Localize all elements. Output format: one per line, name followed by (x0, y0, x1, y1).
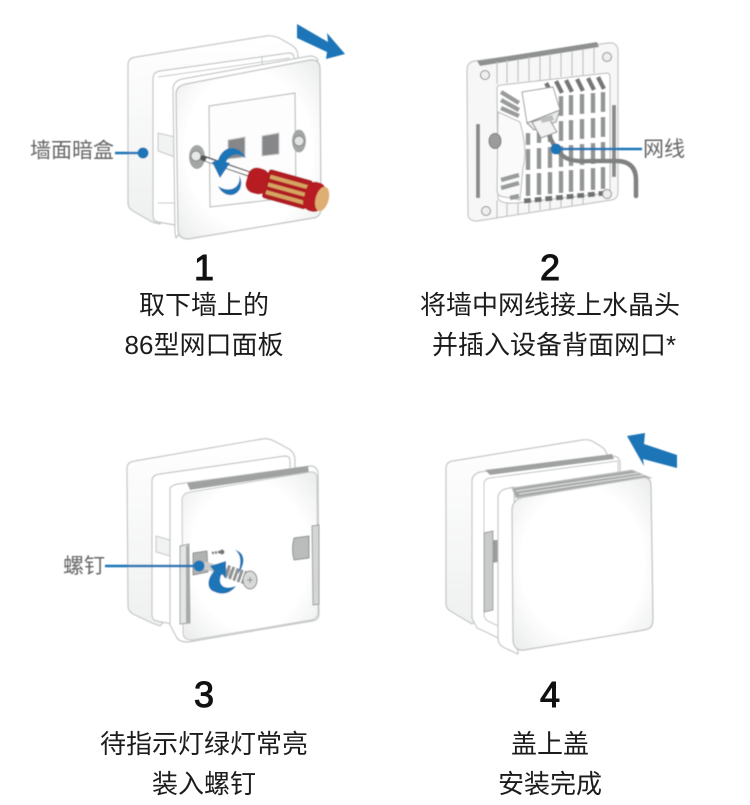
panel: step 3 illustration (63, 439, 319, 642)
left screw hole (193, 551, 208, 575)
small screw head (220, 550, 224, 554)
screw left (189, 145, 205, 169)
wall box clip (156, 536, 170, 556)
rotation arrow (208, 550, 243, 594)
right latch (312, 525, 319, 605)
device face (182, 472, 318, 640)
step 4 caption line 2: 安装完成 (498, 769, 602, 799)
step 2 caption line 1: 将墙中网线接上水晶头 (420, 290, 680, 320)
rotation arrow (212, 148, 246, 195)
step 4 caption line 1: 盖上盖 (511, 729, 589, 759)
hub fins (501, 92, 519, 198)
wall box (446, 440, 608, 624)
mounting frame (472, 456, 620, 638)
port left (228, 137, 245, 159)
frame face edge (484, 461, 618, 626)
cover side (498, 487, 518, 654)
wall box (128, 36, 298, 224)
screwdriver (203, 158, 332, 215)
frame latch (484, 531, 493, 612)
leader line: cable (550, 144, 642, 154)
panel: step 2 illustration (467, 42, 685, 221)
step 3 number: 3 (194, 674, 214, 715)
socket recess (209, 93, 296, 207)
label: cable: 网线 (643, 138, 685, 161)
screw (204, 565, 257, 589)
arrow: pull out (297, 24, 345, 59)
step 4 number: 4 (540, 674, 560, 715)
side latch left (476, 124, 480, 198)
panel: step 1 illustration (30, 24, 345, 239)
cover vent lines (516, 473, 644, 494)
step 3 caption line 2: 装入螺钉 (152, 769, 256, 799)
network cable (549, 135, 636, 196)
step 1 caption line 2: 86型网口面板 (125, 330, 283, 360)
step 1 caption line 1: 取下墙上的 (139, 290, 269, 320)
right screw hole (292, 536, 309, 560)
step 1 number: 1 (194, 247, 214, 288)
leader line: wall box (115, 148, 148, 158)
port right (262, 133, 279, 156)
step 2 number: 2 (540, 247, 560, 288)
inner frame (153, 53, 294, 225)
small screw icon (212, 552, 220, 553)
inner frame (152, 456, 290, 624)
plate fins (497, 48, 594, 218)
label: wall box: 墙面暗盒 (30, 140, 114, 162)
left latch (180, 544, 190, 624)
center block (497, 73, 610, 203)
side latch right (612, 105, 616, 177)
wall box (127, 439, 295, 626)
corner screws (480, 52, 612, 216)
step 2 caption line 2: 并插入设备背面网口* (432, 330, 676, 360)
hub cutout (497, 112, 525, 200)
cover top vents (512, 470, 651, 498)
bottom vent row (524, 193, 606, 201)
top vents strip (187, 466, 309, 490)
wall box clip (158, 133, 175, 157)
frame inner edges (158, 56, 290, 203)
screw right (292, 130, 306, 152)
frame top vents (485, 454, 614, 475)
face plate (176, 60, 321, 239)
vents (528, 92, 603, 196)
device back plate (467, 43, 618, 221)
left latch groove (186, 545, 190, 623)
arrow: push in (627, 433, 677, 468)
leader line: screw (105, 560, 204, 572)
top strip (477, 42, 599, 66)
label: screw: 螺钉 (63, 555, 105, 578)
cover face (512, 478, 653, 650)
frame clip (493, 540, 498, 563)
RJ45 plug (522, 87, 560, 138)
device mounting frame (170, 466, 319, 642)
panel: step 4 illustration (446, 433, 677, 654)
mounting hole (489, 134, 501, 148)
plate side thickness (173, 56, 318, 238)
step 3 caption line 1: 待指示灯绿灯常亮 (100, 729, 308, 759)
top chevron vents (546, 77, 604, 94)
